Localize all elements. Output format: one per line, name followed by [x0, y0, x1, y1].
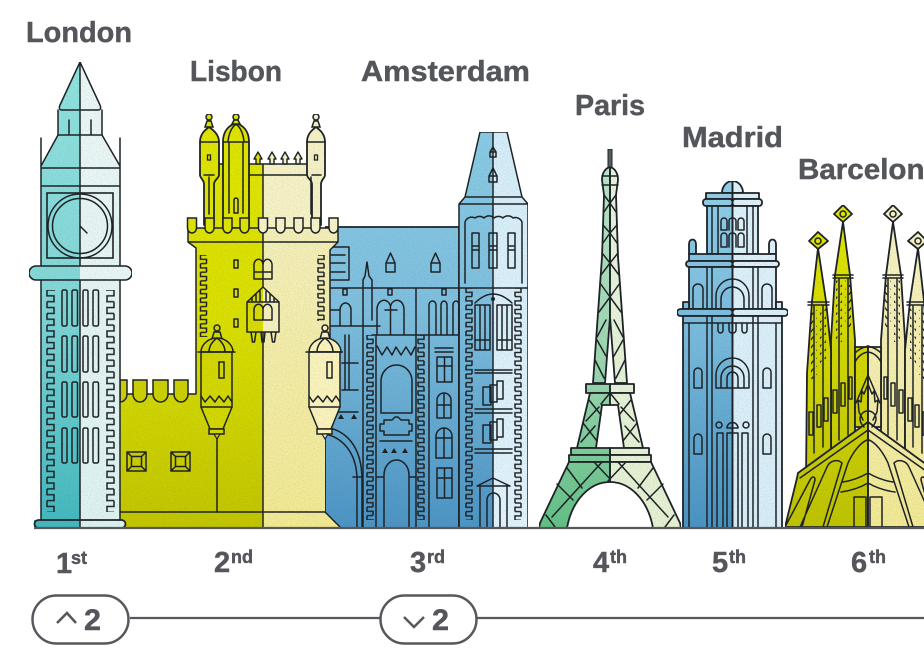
rank: 6th: 6: [851, 547, 867, 579]
main tower body: [120, 218, 340, 528]
rank: 5th: th: [729, 547, 746, 567]
heading: Amsterdam: Amsterdam: [361, 56, 530, 88]
heading: Madrid: Madrid: [682, 122, 783, 154]
tower upper windows: [465, 216, 522, 350]
panel: London building: [29, 62, 132, 528]
meanders and small windows: [200, 255, 325, 337]
rank: 3rd: rd: [427, 547, 445, 567]
icon: roof dormers: [331, 147, 528, 335]
icon: clock face: [47, 193, 113, 258]
meander pilasters: [366, 288, 522, 520]
callout: up 2: 2: [84, 604, 101, 637]
panel: Amsterdam building: [325, 132, 528, 528]
rank: 2nd: 2: [214, 547, 230, 579]
rank: 4th: 4: [593, 547, 609, 579]
callout: down 2: [380, 596, 476, 644]
tower lower ornaments: [475, 370, 512, 528]
rank: 1st: st: [71, 548, 87, 568]
rank: 5th: 5: [712, 547, 728, 579]
central facade details: [325, 288, 459, 528]
hanging balcony: [247, 287, 279, 342]
right sentry box: [306, 325, 343, 439]
left turret: [200, 114, 219, 225]
panel: Madrid tower: [677, 181, 788, 528]
rank: 1st: 1: [56, 548, 72, 580]
heading: Lisbon: Lisbon: [190, 56, 282, 88]
rank: 2nd: nd: [231, 547, 253, 567]
callout: up 2: [32, 596, 128, 644]
rank: 4th: th: [610, 547, 627, 567]
callout: down 2: 2: [432, 604, 449, 637]
right turret: [307, 114, 325, 225]
panel: Lisbon building: [120, 114, 343, 528]
meander edges: [46, 290, 115, 512]
rank: 3rd: 3: [410, 547, 426, 579]
tower fill and outline: [34, 62, 126, 528]
connector line: [130, 617, 924, 619]
rank: 6th: th: [869, 547, 886, 567]
left sentry box: [198, 325, 235, 512]
windows: [62, 290, 98, 463]
heading: Paris: Paris: [575, 90, 645, 122]
balcony band: [29, 266, 132, 280]
central turret: [223, 114, 249, 228]
panel: Barcelona Sagrada Familia: [785, 205, 924, 528]
low wall: [120, 380, 196, 528]
panel: Paris Eiffel tower: [539, 149, 681, 528]
ground line: [34, 527, 924, 529]
heading: London: London: [26, 17, 132, 49]
upper storey wall: [212, 152, 313, 230]
